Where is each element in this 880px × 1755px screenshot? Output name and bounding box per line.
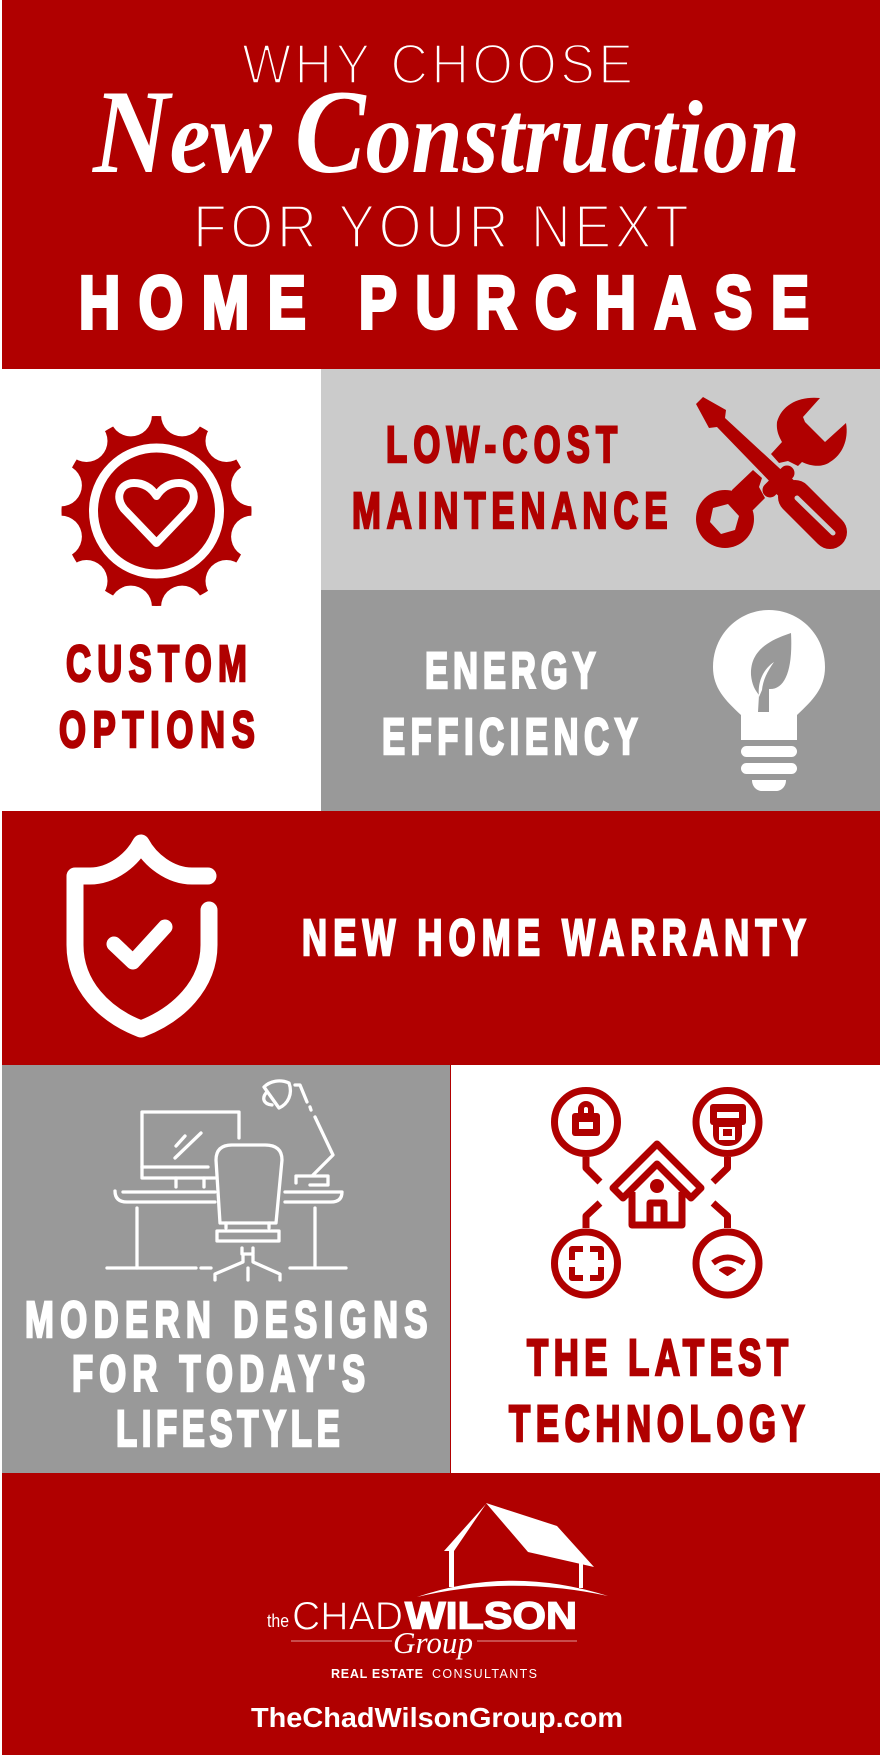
heading: new construction: New Construction: [91, 65, 800, 198]
logo: the chad wilson group: [267, 1503, 608, 1681]
label: custom options: [59, 636, 255, 758]
icon: gear with heart: [40, 394, 273, 628]
website url: TheChadWilsonGroup.com: [251, 1702, 623, 1733]
panel: footer: [2, 1473, 880, 1755]
label: low-cost maintenance: MAINTENANCE: [352, 483, 668, 539]
logo wordmark: Group: [393, 1625, 473, 1660]
heading: why choose: WHY CHOOSE: [242, 32, 633, 96]
logo wordmark: [267, 1594, 577, 1681]
logo wordmark: the: [267, 1611, 289, 1631]
icon: shield with check: [75, 843, 209, 1029]
panel: custom options: [2, 369, 321, 811]
label: low-cost maintenance: [352, 417, 668, 539]
icon: house roof: [417, 1503, 608, 1597]
label: the latest technology: [509, 1330, 805, 1452]
panel: latest technology: [450, 1065, 880, 1473]
panel: low-cost maintenance: [321, 369, 880, 590]
panel: new home warranty: [2, 811, 880, 1065]
panel: header: [2, 0, 880, 369]
label: custom options: OPTIONS: [59, 702, 255, 758]
logo wordmark: REAL ESTATE: [331, 1667, 423, 1681]
icon: wrench and screwdriver: [696, 397, 847, 548]
logo wordmark: WILSON: [405, 1596, 577, 1638]
icon: light bulb with leaf: [713, 610, 825, 791]
label: low-cost maintenance: LOW-COST: [386, 417, 617, 473]
panel: energy efficiency: [321, 590, 880, 811]
label: energy efficiency: EFFICIENCY: [382, 709, 638, 765]
label: the latest technology: TECHNOLOGY: [509, 1396, 805, 1452]
label: modern designs for today's lifestyle: FOR TODAY'S: [72, 1346, 365, 1402]
heading: home purchase: HOME PURCHASE: [79, 261, 809, 344]
logo wordmark: CONSULTANTS: [432, 1667, 537, 1681]
label: the latest technology: THE LATEST: [527, 1330, 788, 1386]
icon: smart home network: [554, 1090, 759, 1295]
label: modern designs for today's lifestyle: [25, 1292, 428, 1457]
label: modern designs for today's lifestyle: MODERN DESIGNS: [25, 1292, 428, 1348]
icon: desk with chair and lamp: [107, 1081, 346, 1280]
heading: for your next: FOR YOUR NEXT: [193, 193, 689, 261]
label: modern designs for today's lifestyle: LIFESTYLE: [116, 1401, 340, 1457]
label: energy efficiency: ENERGY: [425, 643, 596, 699]
panel: modern designs: [2, 1065, 450, 1473]
label: energy efficiency: [382, 643, 638, 765]
label: new home warranty: NEW HOME WARRANTY: [302, 910, 806, 966]
logo wordmark: CHAD: [292, 1594, 403, 1638]
label: custom options: CUSTOM: [66, 636, 247, 692]
